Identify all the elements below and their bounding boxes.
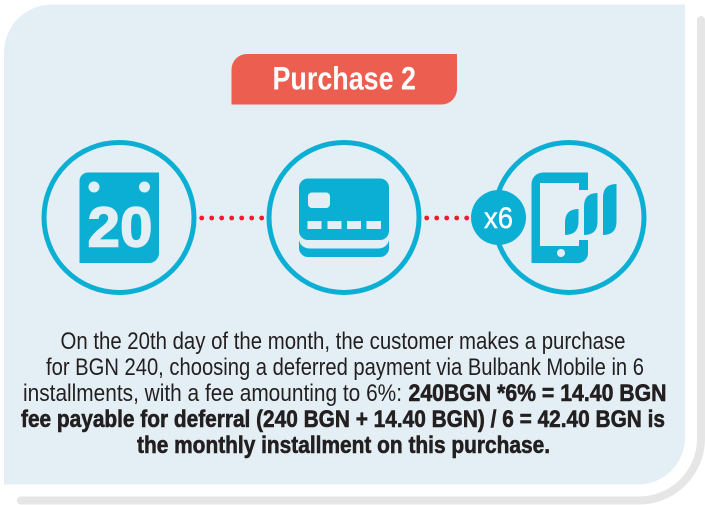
heading: Purchase 2 [232, 54, 457, 104]
text block: purchase explanation: installments, with a fee amounting to 6%: [23, 380, 402, 407]
text block: purchase explanation: the monthly installment on this purchase. [137, 432, 550, 459]
text block: purchase explanation [21, 328, 666, 459]
text block: purchase explanation: 240BGN *6% = 14.40 BGN [408, 380, 666, 407]
icon: calendar with day 20 [44, 142, 194, 292]
heading: Purchase 2: Purchase 2 [272, 60, 416, 96]
icon: mobile phone with bars and x6 badge [471, 142, 644, 292]
connector: dots between card and phone [424, 216, 469, 220]
icon: bank card [269, 142, 419, 292]
icon: calendar with day 20: 20 [88, 196, 152, 260]
connector: dots between calendar and card [199, 216, 264, 220]
icon: mobile phone with bars and x6 badge: x6 [484, 202, 513, 235]
